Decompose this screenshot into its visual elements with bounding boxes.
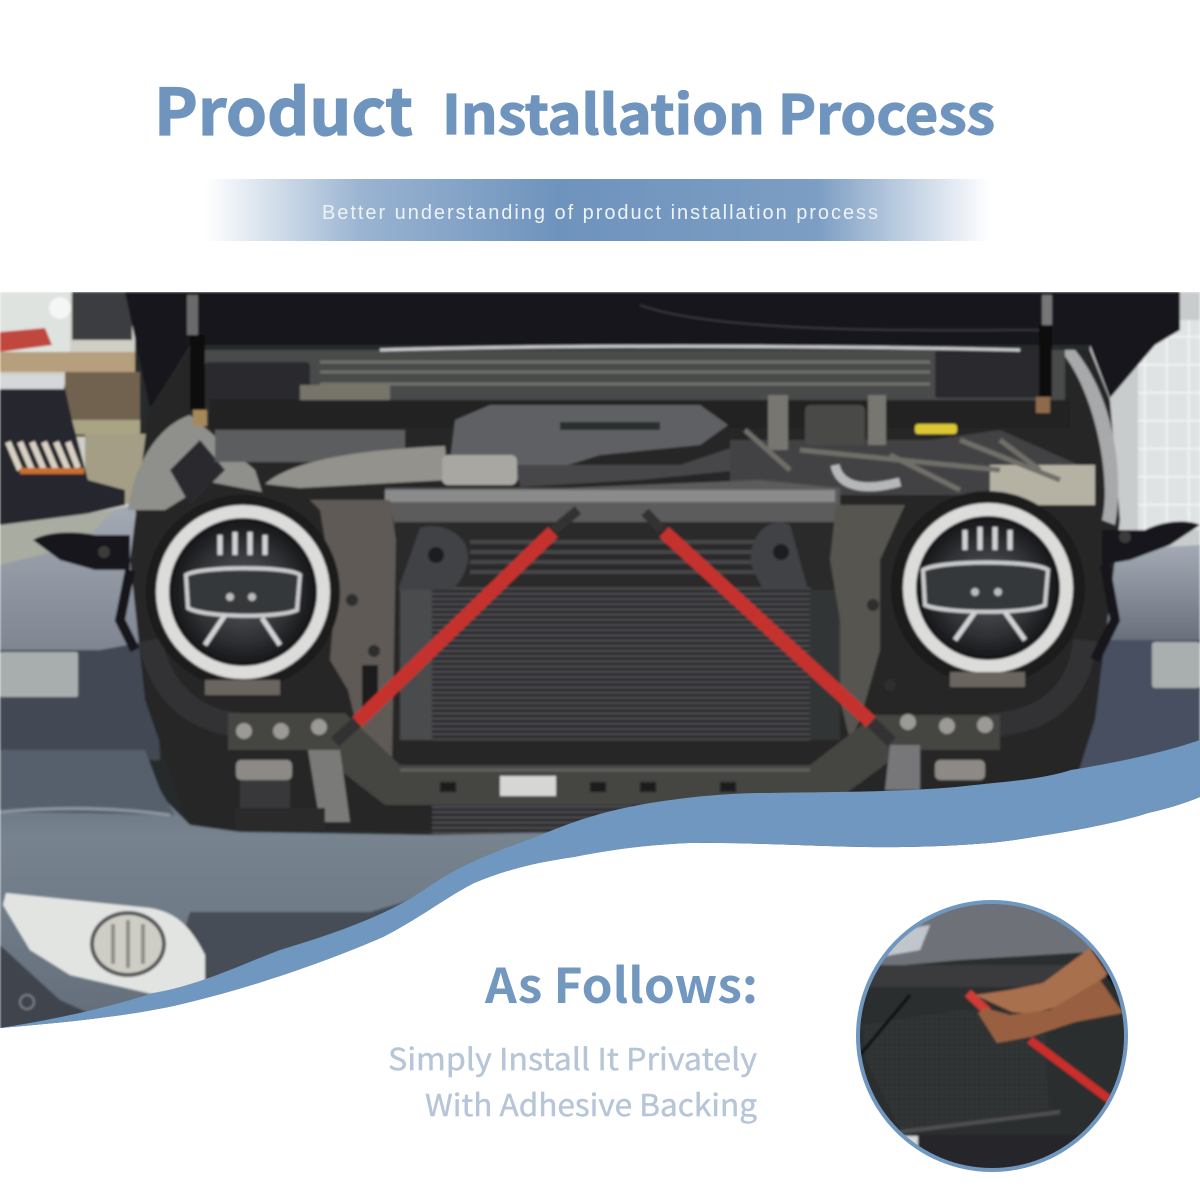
firewall cowl bbox=[203, 348, 1066, 408]
arms and hands bbox=[975, 948, 1108, 1014]
blue wave band bbox=[0, 740, 1200, 1028]
subtitle banner: Better understanding of product installation process bbox=[322, 202, 878, 224]
red strut in hand bbox=[968, 993, 988, 1012]
horns bbox=[398, 522, 808, 590]
lower crossmember bbox=[228, 713, 1000, 805]
title: Installation Process bbox=[442, 71, 995, 150]
description text bbox=[388, 1035, 757, 1125]
fog lamp bbox=[3, 893, 205, 1009]
heading: As Follows: As Follows: bbox=[484, 947, 758, 1017]
left headlight bbox=[146, 495, 340, 695]
left fender bbox=[0, 505, 160, 760]
side brackets bbox=[310, 500, 905, 760]
title bbox=[154, 62, 995, 154]
radiator support crossbar bbox=[383, 480, 842, 524]
hood underside bbox=[125, 292, 1180, 408]
title: Product bbox=[154, 62, 413, 154]
white lower area beneath wave bbox=[0, 797, 1200, 1200]
red strut left bbox=[335, 510, 578, 742]
engine parts bbox=[215, 395, 1095, 505]
right background fence bbox=[1090, 292, 1200, 562]
photo: engine bay with installed red struts bbox=[0, 292, 1200, 1040]
inset background bbox=[860, 904, 1124, 1138]
lower radiator frame loops bbox=[150, 640, 1085, 725]
subtitle banner bbox=[205, 179, 990, 241]
wing edges bbox=[128, 350, 1118, 525]
hood latch clamps bbox=[33, 521, 1200, 660]
circular inset: hands installing strut bbox=[850, 895, 1135, 1180]
parked vehicle behind bbox=[0, 375, 125, 528]
radiator mesh bbox=[866, 1012, 1008, 1128]
description text: With Adhesive Backing bbox=[425, 1081, 757, 1125]
engine bay bbox=[128, 350, 1122, 772]
suspension mounts bbox=[235, 745, 985, 830]
front bumper bbox=[0, 750, 700, 1040]
right fender bbox=[1078, 544, 1200, 769]
radiator bbox=[398, 530, 840, 835]
photo background: yard on the left bbox=[0, 292, 150, 532]
photo base fill bbox=[133, 338, 1200, 848]
red strut right bbox=[645, 512, 892, 742]
description text: Simply Install It Privately bbox=[388, 1035, 757, 1079]
right headlight bbox=[891, 491, 1085, 687]
gas struts bbox=[187, 295, 1052, 426]
